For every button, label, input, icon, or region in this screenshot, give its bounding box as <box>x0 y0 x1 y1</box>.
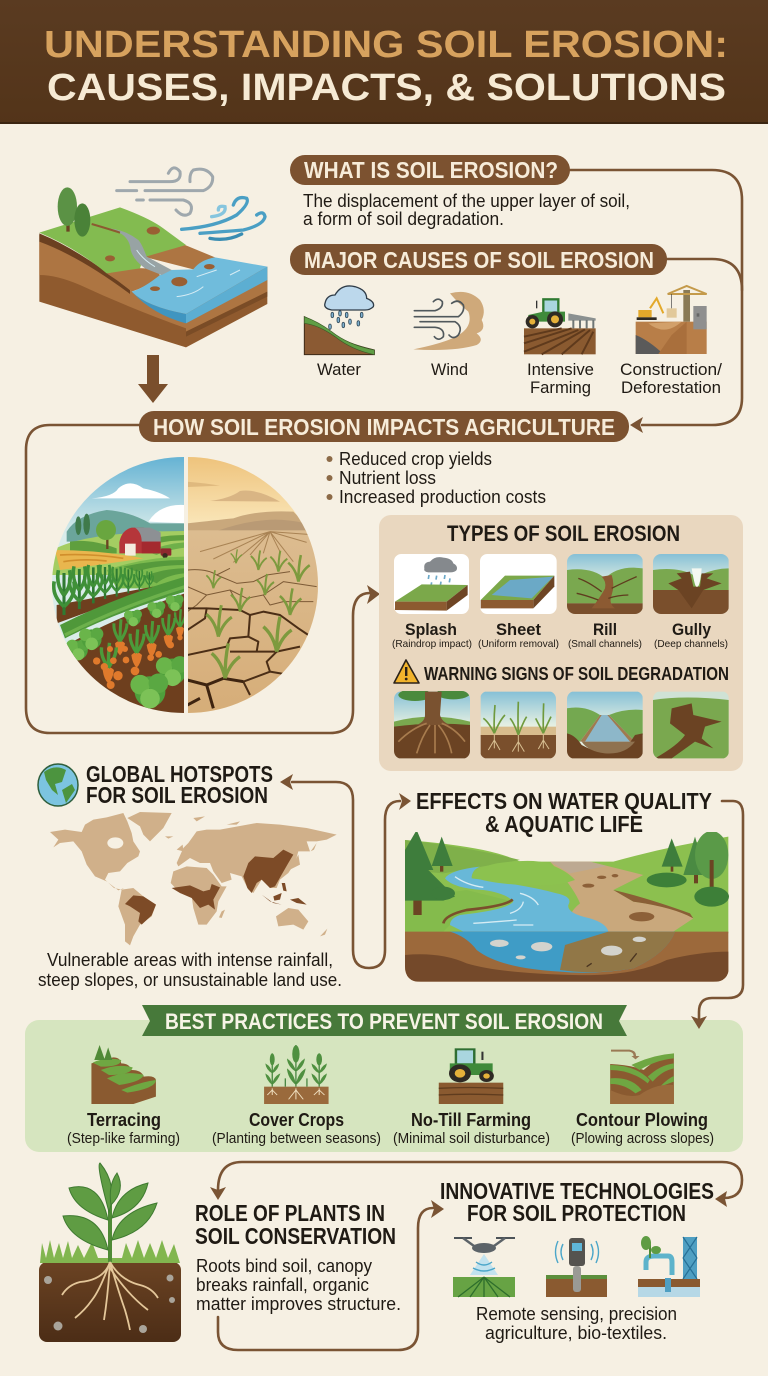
cause labels: Wind <box>431 360 468 379</box>
corn row <box>57 585 162 623</box>
cause labels: Water <box>317 360 361 379</box>
impact bullet list: Increased production costs <box>339 487 546 507</box>
hotspot: brazil <box>125 895 156 925</box>
connector: practices to plants and technology <box>210 1162 742 1207</box>
plant role description: Roots bind soil, canopy <box>196 1256 372 1276</box>
barn <box>119 528 160 553</box>
heading: types: TYPES OF SOIL EROSION <box>447 521 680 546</box>
grass <box>40 1240 180 1263</box>
technology description <box>476 1304 677 1343</box>
type labels: Gully <box>672 620 711 639</box>
cause icon: water <box>304 286 374 355</box>
hotspot: china and india <box>243 850 293 893</box>
connector: water quality to practices <box>691 801 743 1029</box>
panel: best practices <box>25 1005 743 1152</box>
connector: hotspots and water quality <box>280 774 411 968</box>
vegetable bed <box>67 593 185 715</box>
heading: effects on water quality: EFFECTS ON WATER QUALITY <box>416 788 712 814</box>
practice labels: (Step-like farming) <box>67 1131 180 1147</box>
water faces <box>132 292 186 323</box>
sign: silted channel <box>567 692 643 758</box>
underground <box>405 932 728 982</box>
heading: role of plants: SOIL CONSERVATION <box>195 1223 396 1249</box>
illustration: plant with roots <box>39 1163 181 1342</box>
heading: effects on water quality: & AQUATIC LIFE <box>485 811 643 837</box>
title banner: UNDERSTANDING SOIL EROSION: <box>44 24 728 66</box>
plant role description: breaks rainfall, organic <box>196 1275 369 1295</box>
cause labels: Intensive <box>527 360 594 379</box>
fish <box>490 937 646 959</box>
sign: large crack <box>653 692 729 758</box>
cause icon: construction <box>636 286 707 354</box>
ribbon heading: BEST PRACTICES TO PREVENT SOIL EROSION <box>165 1009 603 1034</box>
heading: global hotspots <box>86 761 273 808</box>
arrow: down <box>138 355 168 403</box>
title banner: CAUSES, IMPACTS, & SOLUTIONS <box>47 67 726 109</box>
heading: effects on water quality <box>416 788 712 837</box>
definition text <box>303 191 630 229</box>
illustration: river cross-section <box>405 830 729 982</box>
icon: cover crops <box>264 1045 329 1104</box>
heading: global hotspots: FOR SOIL EROSION <box>86 782 268 808</box>
heading pill: major causes: MAJOR CAUSES OF SOIL EROSION <box>304 247 654 273</box>
plant role description <box>196 1256 401 1314</box>
impact bullet list: Nutrient loss <box>339 468 436 488</box>
icon: drone over field <box>453 1238 515 1297</box>
type labels: (Deep channels) <box>654 638 728 650</box>
soil faces <box>39 235 267 347</box>
heading: role of plants: ROLE OF PLANTS IN <box>195 1200 385 1226</box>
type labels: Rill <box>593 620 617 639</box>
hedge <box>60 577 185 638</box>
heading pill: what is soil erosion: WHAT IS SOIL EROSION? <box>304 157 558 183</box>
north america <box>50 813 140 890</box>
practice labels <box>67 1110 714 1147</box>
wind swirls <box>117 168 213 215</box>
hotspot description: steep slopes, or unsustainable land use. <box>38 970 342 990</box>
rocks <box>582 874 654 921</box>
heading: global hotspots: GLOBAL HOTSPOTS <box>86 761 273 787</box>
grass island <box>472 861 575 885</box>
south america <box>118 888 156 945</box>
technology description: Remote sensing, precision <box>476 1304 677 1324</box>
hotspot description: Vulnerable areas with intense rainfall, <box>47 950 333 970</box>
type: gully <box>653 554 729 614</box>
connector: plants to technologies <box>218 1200 444 1350</box>
warning icon <box>394 660 419 683</box>
rocks <box>105 227 215 291</box>
practice labels: Contour Plowing <box>576 1110 708 1130</box>
trees <box>68 215 82 236</box>
cause labels: Farming <box>530 378 591 397</box>
hotspot description <box>38 950 342 990</box>
icon: no-till farming <box>439 1049 503 1104</box>
practice labels: (Planting between seasons) <box>212 1131 381 1147</box>
icon: terracing <box>91 1045 156 1104</box>
impact bullet list <box>326 449 546 507</box>
islands and australia <box>165 816 327 936</box>
cause labels: Deforestation <box>621 378 721 397</box>
practice labels: (Plowing across slopes) <box>571 1131 714 1147</box>
cause icon: intensive farming <box>524 299 596 354</box>
heading pill: impacts on agriculture: HOW SOIL EROSION IMPACTS AGRICULTURE <box>153 414 615 440</box>
practice labels: No-Till Farming <box>411 1110 531 1130</box>
type: rill <box>567 554 643 614</box>
cause icon: wind <box>413 292 484 350</box>
hotspot: central africa <box>172 884 220 910</box>
greenland <box>127 812 172 841</box>
type labels: Splash <box>405 620 457 639</box>
hudson bay <box>107 837 123 849</box>
title banner <box>0 0 768 124</box>
icon: bio-engineering installation <box>638 1236 700 1297</box>
fine cracks <box>187 568 317 612</box>
chart: world map of hotspots <box>50 812 337 945</box>
technology description: agriculture, bio-textiles. <box>485 1323 667 1343</box>
connectors: top right to impacts heading <box>565 170 742 433</box>
type: sheet <box>480 554 557 614</box>
water swirls <box>182 197 265 239</box>
trees <box>413 898 422 915</box>
sign: sparse plants <box>481 692 557 758</box>
deep cracks <box>187 608 308 695</box>
heading: innovative technologies: INNOVATIVE TECHNOLOGIES <box>440 1178 714 1204</box>
roots <box>62 1262 158 1330</box>
eurasia <box>177 823 337 893</box>
panel: types and warning signs <box>379 515 743 771</box>
sediment channel <box>550 862 693 932</box>
type labels: Sheet <box>496 620 541 639</box>
type labels <box>392 620 728 650</box>
type: splash <box>394 554 469 614</box>
practice labels: Terracing <box>87 1110 161 1130</box>
cause labels: Construction/ <box>620 360 722 379</box>
river <box>445 867 608 932</box>
africa <box>171 866 227 925</box>
type labels: (Uniform removal) <box>478 638 559 650</box>
illustration: eroded hillside block <box>39 168 267 347</box>
water surface <box>132 257 267 314</box>
heading: innovative technologies: FOR SOIL PROTECTION <box>467 1200 686 1226</box>
green strip fields <box>107 557 185 588</box>
type labels: (Raindrop impact) <box>392 638 472 650</box>
sign: exposed roots <box>394 687 470 758</box>
heading: innovative technologies <box>440 1178 714 1226</box>
yellow strip field <box>55 550 143 570</box>
healthy half <box>50 455 188 715</box>
hotspot: southeast asia <box>262 883 307 905</box>
connector: impacts to types panel <box>26 425 380 733</box>
plant role description: matter improves structure. <box>196 1294 401 1314</box>
type labels: (Small channels) <box>568 638 642 650</box>
impact bullet list: Reduced crop yields <box>339 449 492 469</box>
grass surface <box>39 207 186 273</box>
icon: contour plowing <box>610 1051 674 1104</box>
degraded half <box>187 455 320 717</box>
stream <box>92 223 172 275</box>
illustration: healthy vs degraded farm circle <box>50 455 320 717</box>
heading: role of plants <box>195 1200 396 1249</box>
cause labels <box>317 360 722 397</box>
icon: soil sensor <box>546 1238 607 1297</box>
definition text: a form of soil degradation. <box>303 209 504 229</box>
ground patches <box>107 268 160 292</box>
definition text: The displacement of the upper layer of soil, <box>303 191 630 211</box>
globe icon <box>38 764 78 806</box>
practice labels: Cover Crops <box>249 1110 344 1130</box>
practice labels: (Minimal soil disturbance) <box>393 1131 550 1147</box>
stem and leaves <box>108 1190 112 1262</box>
